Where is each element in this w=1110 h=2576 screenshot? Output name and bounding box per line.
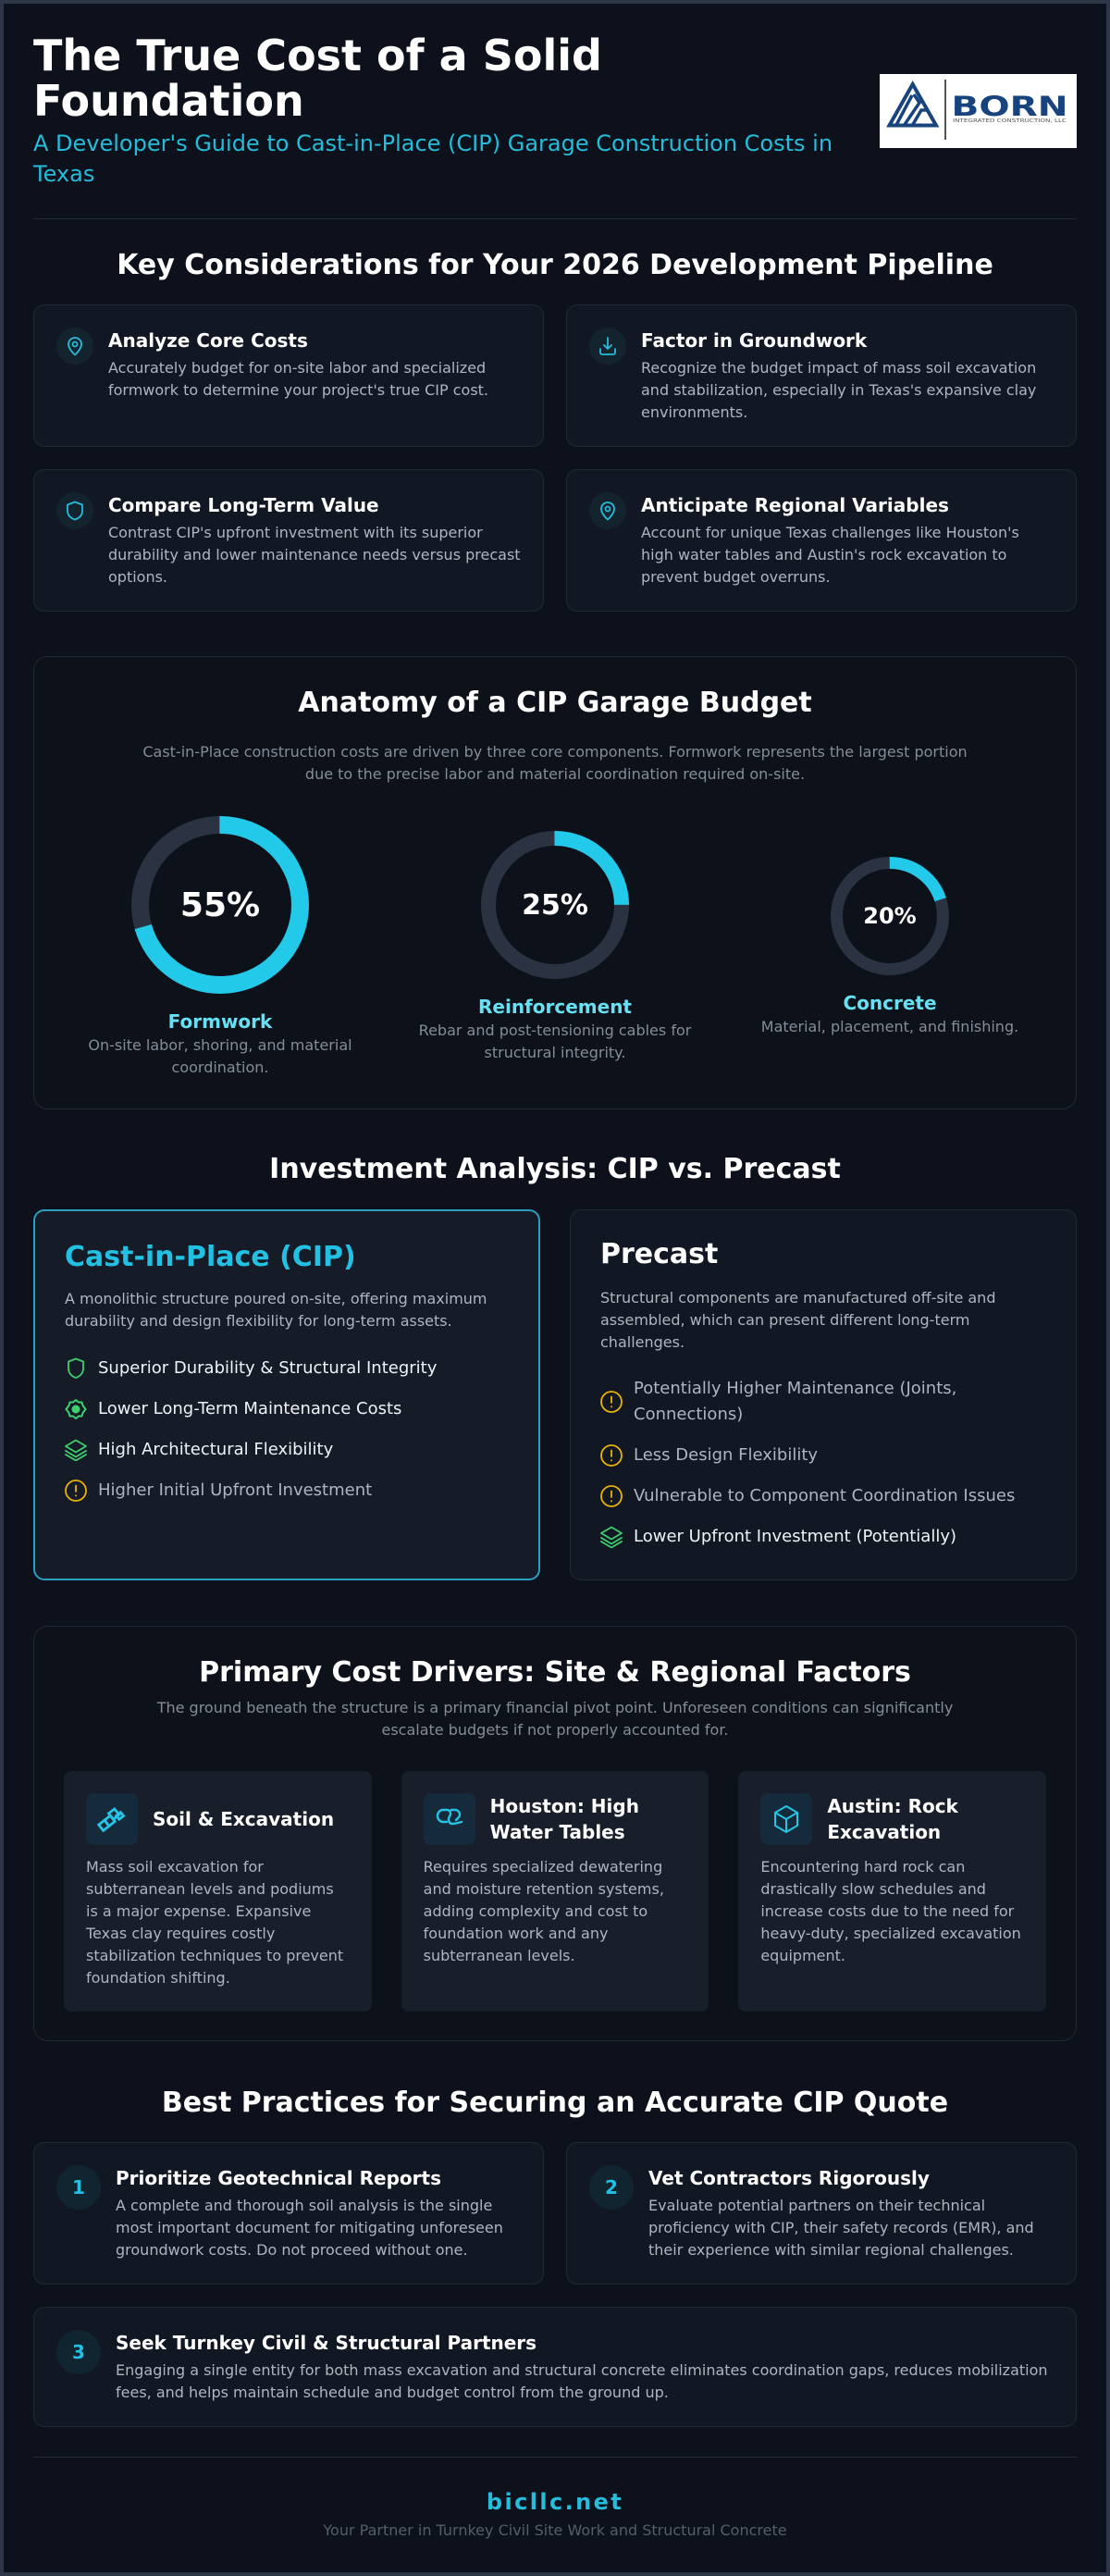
footer: tagline: Your Partner in Turnkey Civil Site Work and Structural Concrete <box>323 2521 787 2539</box>
list item: design flexibility: Less Design Flexibility <box>634 1445 818 1465</box>
text: houston description: and moisture retention systems, <box>424 1880 664 1898</box>
panel: primary cost drivers <box>33 1626 1077 2041</box>
text: analyze core costs <box>108 329 488 398</box>
text: CIP description: durability and design flexibility for long-term assets. <box>65 1312 452 1330</box>
text: soil description: foundation shifting. <box>86 1969 230 1987</box>
text: anatomy description: Cast-in-Place construction costs are driven by three core components. Formwork represents the largest portion <box>142 743 968 761</box>
header: houston <box>424 1793 639 1845</box>
panel: anatomy of a CIP garage budget <box>33 656 1077 1109</box>
text: practice 1: groundwork costs. Do not proceed without one. <box>116 2241 468 2258</box>
title <box>33 31 602 126</box>
text: anticipate regional variables: high water tables and Austin's rock excavation to <box>641 546 1006 563</box>
chart: formwork donut <box>131 816 309 994</box>
text: compare long-term value <box>108 494 521 585</box>
number badge: 1: 1 <box>72 2176 85 2198</box>
text: practice 1: Prioritize Geotechnical Reports <box>116 2167 441 2189</box>
text: CIP description <box>65 1290 487 1330</box>
text: concrete description: Material, placement, and finishing. <box>761 1018 1018 1035</box>
text: anticipate regional variables: Anticipate Regional Variables <box>641 494 949 516</box>
header: austin <box>760 1793 958 1845</box>
text: austin description: increase costs due to the need for <box>760 1902 1014 1920</box>
card: compare long-term value <box>33 469 544 612</box>
panel: cast-in-place <box>33 1209 540 1580</box>
text: anatomy description: due to the precise labor and material coordination required on-site. <box>305 765 805 783</box>
text: houston description: Requires specialized dewatering <box>424 1858 662 1876</box>
text: precast description: assembled, which can present different long-term <box>600 1311 969 1329</box>
text: houston description: subterranean levels. <box>424 1947 575 1964</box>
icon: map pin <box>56 328 93 365</box>
text: soil description: is a major expense. Expansive <box>86 1902 311 1920</box>
heading: precast: Precast <box>600 1238 718 1270</box>
text: formwork description: coordination. <box>172 1059 268 1076</box>
chart: concrete donut <box>831 857 949 975</box>
heading: cast-in-place: Cast-in-Place (CIP) <box>65 1241 356 1273</box>
text: compare long-term value: options. <box>108 568 167 585</box>
text: anatomy description <box>142 743 968 783</box>
chart: reinforcement donut <box>481 831 629 979</box>
list item: maintenance: Lower Long-Term Maintenance Costs <box>98 1399 401 1418</box>
list item: maintenance: Connections) <box>634 1405 743 1424</box>
list item: upfront investment: Higher Initial Upfront Investment <box>98 1480 372 1500</box>
heading: anatomy: Anatomy of a CIP Garage Budget <box>298 687 812 719</box>
text: analyze core costs: Analyze Core Costs <box>108 329 308 352</box>
panel: precast <box>570 1209 1077 1580</box>
logo: Born Integrated Construction: BORN <box>951 91 1067 122</box>
text: formwork description <box>88 1036 352 1076</box>
card: factor in groundwork <box>566 304 1077 447</box>
footer: website: bicllc.net <box>487 2489 623 2515</box>
chart: formwork donut: 55% <box>180 886 260 923</box>
text: precast description: Structural components are manufactured off-site and <box>600 1289 995 1307</box>
text: practice 3 <box>116 2332 1048 2400</box>
text: compare long-term value: durability and lower maintenance needs versus precast <box>108 546 521 563</box>
text: drivers description: escalate budgets if not properly accounted for. <box>381 1721 729 1739</box>
number badge: 2 <box>589 2165 634 2210</box>
subtitle: A Developer's Guide to Cast-in-Place (CIP) Garage Construction Costs in <box>33 130 832 156</box>
text: analyze core costs: formwork to determine your project's true CIP cost. <box>108 381 488 398</box>
text: factor in groundwork: Factor in Groundwork <box>641 329 867 352</box>
icon: water loops <box>424 1793 475 1845</box>
list item: maintenance <box>600 1379 956 1424</box>
text: practice 2: Vet Contractors Rigorously <box>648 2167 930 2189</box>
card: anticipate regional variables <box>566 469 1077 612</box>
icon: shield <box>56 492 93 529</box>
text: soil description: Texas clay requires costly <box>86 1925 275 1942</box>
text: anticipate regional variables: prevent budget overruns. <box>641 568 831 585</box>
card: practice 3 <box>33 2307 1077 2427</box>
text: practice 2 <box>648 2167 1034 2258</box>
title: soil and excavation: Soil & Excavation <box>153 1808 334 1830</box>
column: concrete 20% <box>761 857 1018 1035</box>
icon: blocks <box>86 1793 138 1845</box>
text: practice 1 <box>116 2167 503 2258</box>
text: compare long-term value: Contrast CIP's upfront investment with its superior <box>108 524 483 540</box>
text: analyze core costs: Accurately budget for on-site labor and specialized <box>108 359 486 376</box>
heading: primary cost drivers: Primary Cost Drivers: Site & Regional Factors <box>199 1656 911 1689</box>
text: practice 2: Evaluate potential partners on their technical <box>648 2197 985 2213</box>
icon: download <box>589 328 626 365</box>
subtitle: Texas <box>33 161 94 187</box>
text: precast description: challenges. <box>600 1333 684 1351</box>
logo: Born Integrated Construction: INTEGRATED CONSTRUCTION, LLC <box>953 118 1067 124</box>
header: soil and excavation <box>86 1793 334 1845</box>
heading: key considerations: Key Considerations for Your 2026 Development Pipeline <box>117 249 993 281</box>
text: houston description: foundation work and any <box>424 1925 608 1942</box>
subtitle <box>33 130 832 187</box>
label: concrete: Concrete <box>843 992 937 1014</box>
text: precast description <box>600 1289 995 1351</box>
text: anticipate regional variables: Account for unique Texas challenges like Houston's <box>641 524 1019 540</box>
text: soil description <box>85 1858 343 1987</box>
text: houston description: adding complexity and cost to <box>424 1902 648 1920</box>
title: Foundation <box>33 76 304 126</box>
title: austin rock excavation <box>827 1795 958 1843</box>
list item: maintenance: Potentially Higher Maintenance (Joints, <box>634 1379 956 1398</box>
list item: durability: Superior Durability & Structural Integrity <box>98 1358 437 1378</box>
text: factor in groundwork: and stabilization, especially in Texas's expansive clay <box>641 381 1036 398</box>
number badge: 1 <box>56 2165 101 2210</box>
text: practice 3: Seek Turnkey Civil & Structural Partners <box>116 2332 536 2354</box>
card: practice 1 <box>33 2142 544 2285</box>
text: practice 3: Engaging a single entity for both mass excavation and structural concrete eliminates coordination gaps, reduces mobilization <box>116 2361 1048 2378</box>
text: austin description: Encountering hard rock can <box>760 1858 965 1876</box>
text: practice 1: A complete and thorough soil analysis is the single <box>116 2197 492 2213</box>
text: formwork description: On-site labor, shoring, and material <box>88 1036 352 1054</box>
number badge: 3 <box>56 2330 101 2374</box>
text: austin description: drastically slow schedules and <box>760 1880 986 1898</box>
text: anticipate regional variables <box>641 494 1019 585</box>
text: compare long-term value: Compare Long-Term Value <box>108 494 379 516</box>
title: austin rock excavation: Excavation <box>827 1821 941 1843</box>
text: soil description: subterranean levels and podiums <box>86 1880 334 1898</box>
text: practice 1: most important document for mitigating unforeseen <box>116 2219 503 2235</box>
chart: concrete donut: 20% <box>863 903 917 929</box>
heading: best practices: Best Practices for Securing an Accurate CIP Quote <box>162 2087 948 2119</box>
heading: investment analysis: Investment Analysis: CIP vs. Precast <box>269 1153 841 1185</box>
text: practice 3: fees, and helps maintain schedule and budget control from the ground up. <box>116 2384 669 2400</box>
card: analyze core costs <box>33 304 544 447</box>
text: factor in groundwork: environments. <box>641 403 747 420</box>
title: The True Cost of a Solid <box>33 31 602 80</box>
icon: map pin <box>589 492 626 529</box>
logo: Born Integrated Construction <box>880 74 1077 148</box>
list item: coordination: Vulnerable to Component Coordination Issues <box>634 1486 1015 1505</box>
list item: flexibility: High Architectural Flexibility <box>98 1440 333 1459</box>
label: formwork: Formwork <box>168 1010 272 1033</box>
card: houston <box>401 1771 709 2012</box>
number badge: 2: 2 <box>605 2176 618 2198</box>
text: reinforcement description: structural integrity. <box>485 1044 625 1061</box>
column: formwork 55% <box>88 816 352 1076</box>
title: houston high water tables <box>490 1795 639 1843</box>
text: factor in groundwork: Recognize the budget impact of mass soil excavation <box>641 359 1036 376</box>
text: drivers description <box>157 1699 953 1739</box>
text: austin description: equipment. <box>760 1947 845 1964</box>
number badge: 3: 3 <box>72 2341 85 2363</box>
text: reinforcement description <box>419 1022 692 1061</box>
text: drivers description: The ground beneath the structure is a primary financial pivot point. Unforeseen conditions can significantly <box>157 1699 953 1716</box>
text: houston description <box>424 1858 664 1964</box>
card: austin <box>738 1771 1046 2012</box>
list item: lower upfront: Lower Upfront Investment (Potentially) <box>634 1527 956 1546</box>
title: houston high water tables: Houston: High <box>490 1795 639 1817</box>
text: factor in groundwork <box>641 329 1036 420</box>
text: reinforcement description: Rebar and post-tensioning cables for <box>419 1022 691 1039</box>
text: austin description: heavy-duty, specialized excavation <box>760 1925 1021 1942</box>
card: practice 2 <box>566 2142 1077 2285</box>
text: practice 2: proficiency with CIP, their safety records (EMR), and <box>648 2219 1034 2235</box>
icon: cube <box>760 1793 812 1845</box>
text: soil description: Mass soil excavation for <box>86 1858 264 1876</box>
text: austin description <box>760 1858 1021 1964</box>
text: practice 2: their experience with similar regional challenges. <box>648 2241 1014 2258</box>
title: austin rock excavation: Austin: Rock <box>827 1795 958 1817</box>
chart: reinforcement donut: 25% <box>522 888 588 922</box>
label: reinforcement: Reinforcement <box>478 996 632 1018</box>
card: soil and excavation <box>64 1771 372 2012</box>
title: houston high water tables: Water Tables <box>490 1821 625 1843</box>
column: reinforcement 25% <box>419 831 692 1061</box>
text: soil description: stabilization techniques to prevent <box>86 1947 343 1964</box>
text: CIP description: A monolithic structure poured on-site, offering maximum <box>65 1290 487 1307</box>
